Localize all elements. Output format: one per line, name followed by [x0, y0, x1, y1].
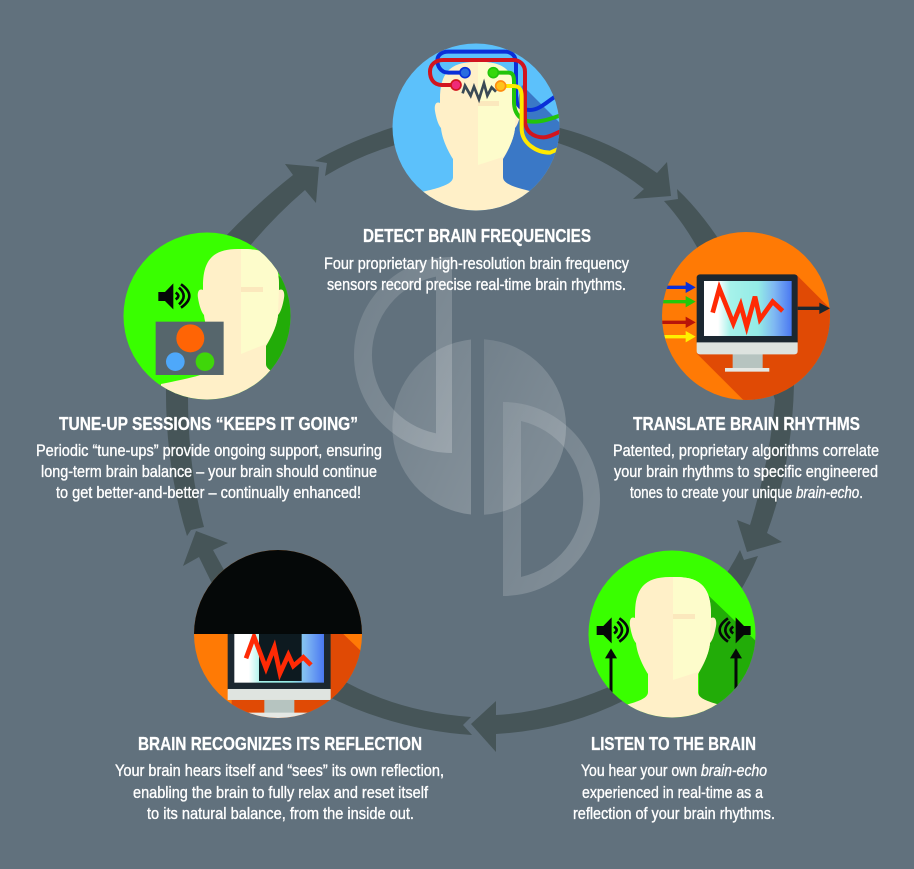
icon: monitor with waveform: [660, 230, 837, 403]
heading: BRAIN RECOGNIZES ITS REFLECTION: [138, 733, 422, 754]
text block: Four proprietary high-resolution brain frequency: [324, 255, 630, 273]
text block: [573, 762, 775, 823]
text block: to get better-and-better – continually enhanced!: [56, 484, 361, 502]
panel: translate brain rhythms: [613, 230, 879, 502]
text block: to its natural balance, from the inside out.: [147, 805, 414, 823]
text block: reflection of your brain rhythms.: [573, 805, 775, 823]
arrow: connector into tune-up: [166, 385, 204, 536]
icon: head with speaker and dots: [124, 232, 290, 400]
arrow: recognizes to tune-up: [183, 531, 235, 600]
arrow: detect to translate: [552, 127, 671, 199]
text block: your brain rhythms to specific engineered: [614, 463, 878, 481]
cycle arrows ring: [166, 122, 794, 752]
text block: [613, 442, 879, 502]
text block: experienced in real-time as a: [582, 784, 764, 802]
panel: listen to the brain: [573, 548, 775, 823]
text block: Periodic “tune-ups” provide ongoing support, ensuring: [36, 442, 382, 460]
arrow: translate to listen: [737, 385, 794, 552]
text block: [115, 762, 444, 823]
text block: tones to create your unique brain-echo.: [630, 484, 863, 502]
arrow: connector into translate: [664, 189, 745, 285]
text block: [36, 442, 382, 502]
arrow: connector into recognizes: [325, 676, 472, 735]
panel: tune-up sessions: [36, 230, 382, 502]
text block: long-term brain balance – your brain should continue: [41, 463, 377, 481]
text block: You hear your own brain-echo: [581, 762, 767, 780]
heading: TRANSLATE BRAIN RHYTHMS: [633, 413, 860, 434]
text block: sensors record precise real-time brain rhythms.: [327, 276, 626, 294]
icon: head with speakers: [588, 550, 756, 718]
icon: blacked-out monitor: [194, 550, 362, 718]
arrow: connector into listen: [718, 550, 758, 595]
text block: Your brain hears itself and “sees” its own reflection,: [115, 762, 444, 780]
icon: head with sensors: [392, 44, 560, 210]
heading: TUNE-UP SESSIONS “KEEPS IT GOING”: [59, 413, 358, 434]
arrow: connector into detect: [315, 122, 410, 176]
heading: LISTEN TO THE BRAIN: [591, 733, 756, 754]
text block: Patented, proprietary algorithms correlate: [613, 442, 879, 460]
logo watermark: [354, 257, 600, 596]
panel: detect brain frequencies: [324, 40, 630, 294]
arrow: listen to recognizes: [471, 680, 625, 752]
panel: brain recognizes its reflection: [115, 540, 444, 823]
arrow: tune-up to detect: [222, 164, 319, 258]
heading: DETECT BRAIN FREQUENCIES: [363, 225, 591, 246]
text block: [324, 255, 630, 294]
text block: enabling the brain to fully relax and reset itself: [133, 784, 428, 802]
